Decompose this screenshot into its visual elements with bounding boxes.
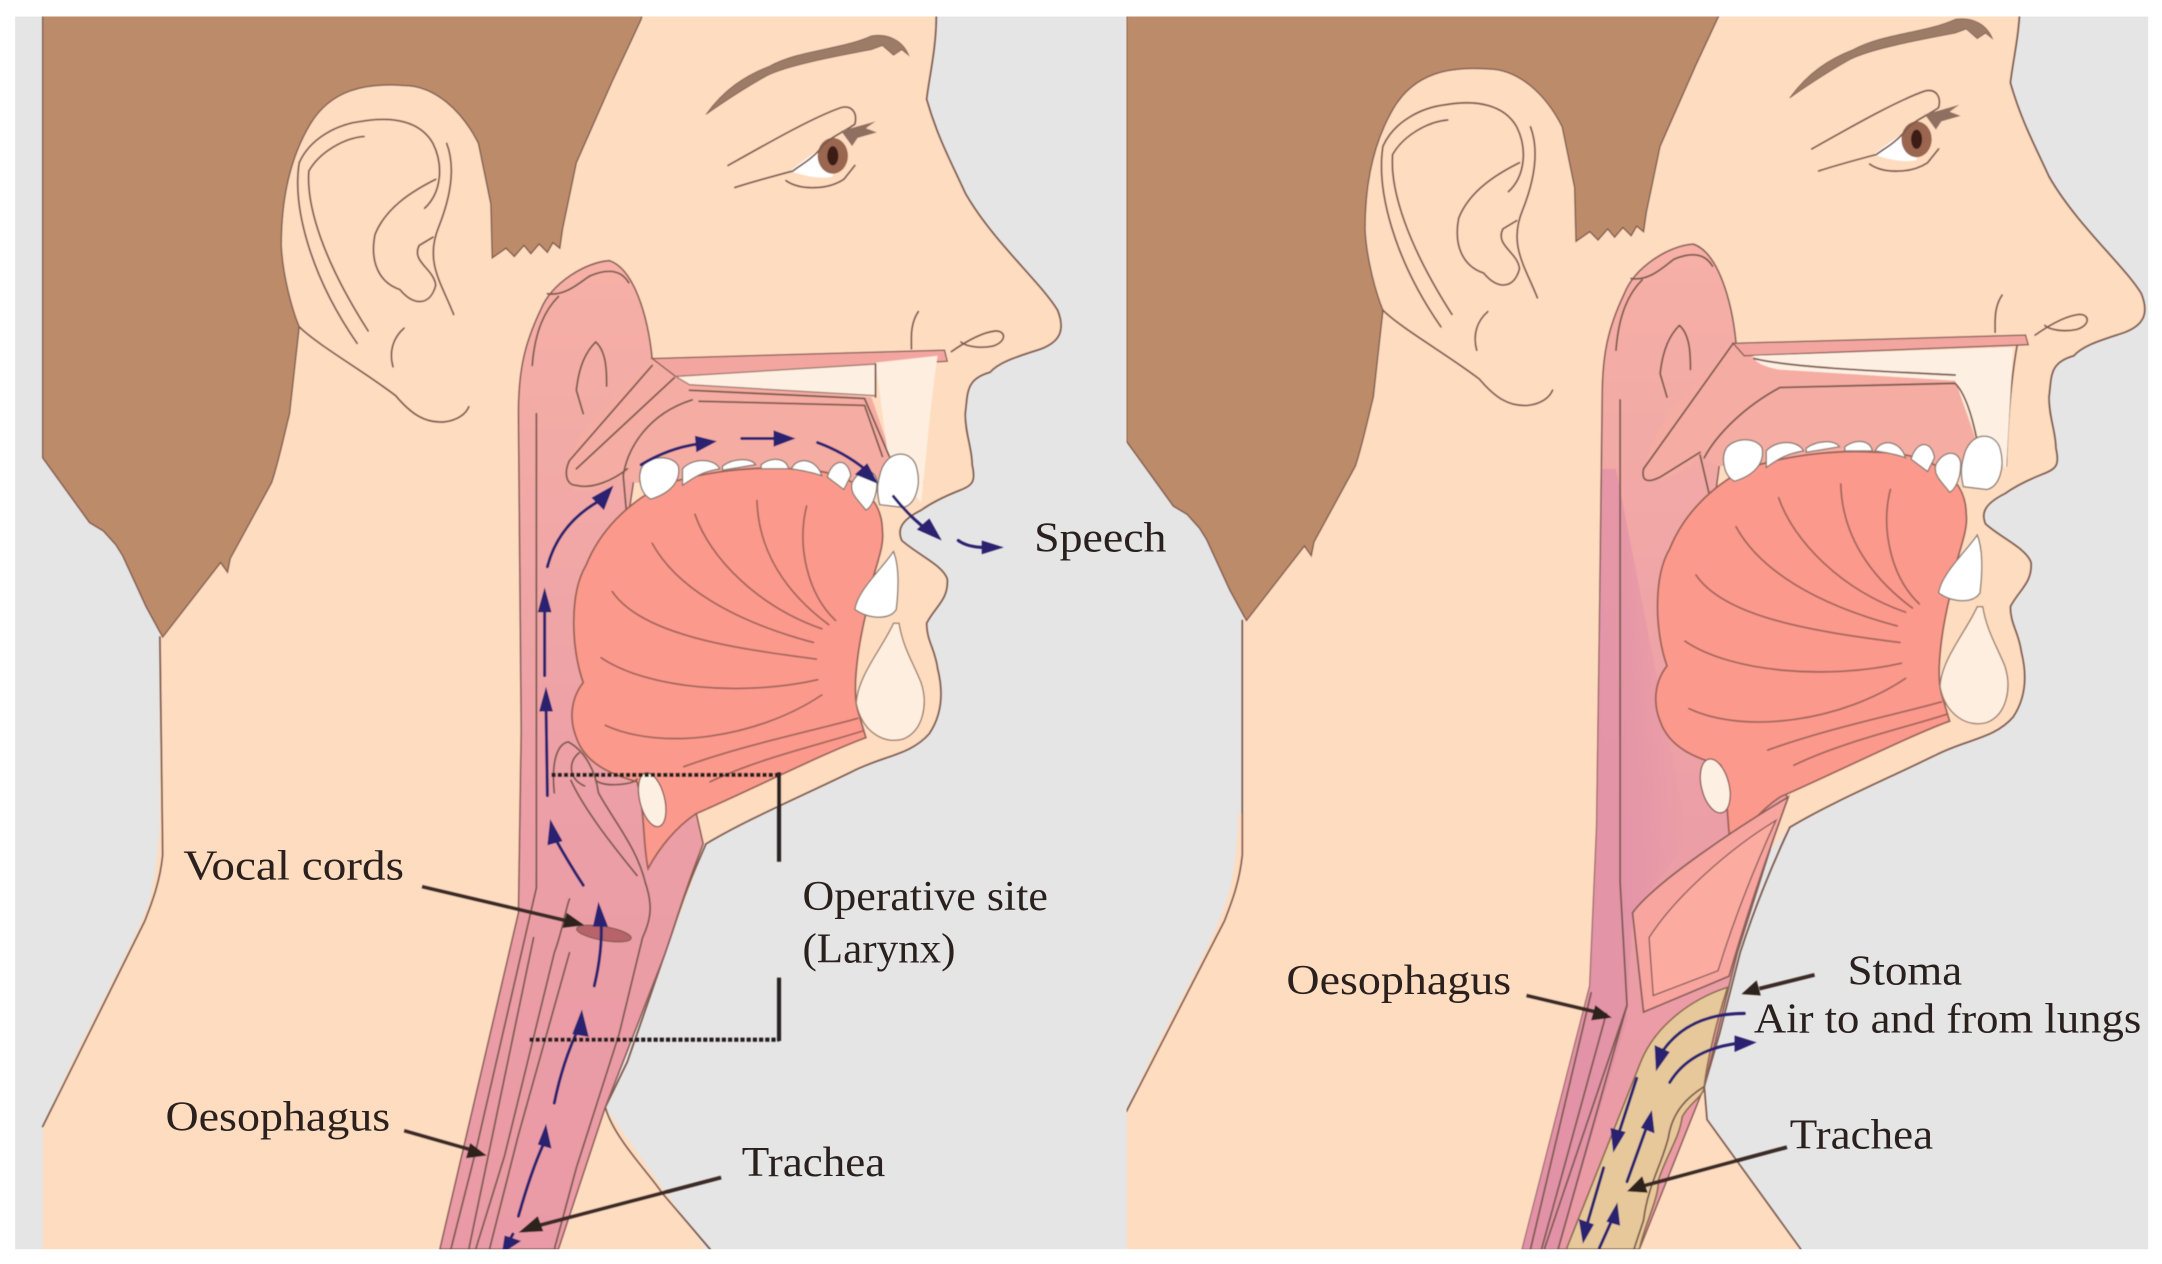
upper teeth: [1724, 436, 2002, 492]
leader line: oesophagus: [404, 1131, 487, 1158]
label: Air to and from lungs: Air to and from lungs: [1754, 996, 2141, 1043]
vocal cords: [576, 924, 632, 943]
oesophagus: [1522, 469, 1648, 1250]
reconstructed pharynx flap: [1633, 797, 1788, 1012]
label: Oesophagus: Oesophagus: [165, 1094, 390, 1141]
nostril and philtrum: [911, 312, 1003, 483]
neck outline: [43, 637, 710, 1249]
label: Stoma: Stoma: [1848, 947, 1962, 994]
label: Trachea: Trachea: [1790, 1112, 1933, 1159]
trachea: [1566, 987, 1728, 1249]
tongue, lower tooth and jaw bone: [1656, 452, 2008, 852]
leader line: trachea: [1627, 1147, 1787, 1193]
labels: before surgery: [165, 515, 1166, 1186]
airflow arrows: [502, 430, 1004, 1253]
face profile: [1790, 0, 2145, 827]
inner pharynx outline: [1544, 255, 1713, 1249]
pharynx and airway: [440, 261, 703, 1249]
panel: after surgery (stoma): [1127, 0, 2145, 1249]
hyoid bone: [637, 772, 668, 828]
ear: [1382, 103, 1553, 406]
label: Speech: Speech: [1034, 515, 1166, 562]
label: Larynx: (Larynx): [802, 925, 956, 972]
hair: [43, 0, 647, 637]
nostril and philtrum: [1995, 295, 2087, 466]
soft palate and mouth roof: [1643, 335, 2028, 496]
label: Oesophagus: Oesophagus: [1286, 957, 1511, 1004]
tongue, lower tooth and jaw bone: [572, 468, 924, 869]
ear: [298, 119, 469, 422]
epiglottis and larynx outline: [451, 742, 650, 1249]
label: Trachea: Trachea: [742, 1139, 885, 1186]
eye and eyebrow: [1790, 19, 1992, 171]
inner pharynx outline: [532, 271, 629, 888]
operative site bracket: [529, 772, 779, 1041]
leader line: trachea: [518, 1178, 721, 1233]
neck outline: [1127, 620, 1801, 1249]
label: Operative site (Larynx): Operative site: [802, 873, 1048, 920]
neck skin: [43, 809, 706, 1249]
labels: after surgery: [1286, 947, 2141, 1159]
face skin: [1244, 0, 2145, 880]
panel: before surgery (normal speech): [43, 0, 1061, 1253]
airflow arrows: [1579, 1013, 1757, 1248]
face profile: [706, 0, 1061, 844]
hair: [1127, 0, 1730, 620]
face skin: [160, 0, 1061, 896]
leader line: stoma: [1741, 975, 1815, 996]
soft palate and mouth roof: [566, 350, 947, 503]
pharynx: [1522, 244, 1787, 1249]
label: Vocal cords: Vocal cords: [183, 843, 404, 890]
neck skin: [1127, 801, 1801, 1249]
leader line: vocal cords: [422, 887, 585, 928]
upper teeth: [640, 454, 918, 510]
oesophagus inner lines: [1530, 993, 1704, 1249]
eye and eyebrow: [706, 35, 909, 188]
leader line: oesophagus: [1526, 996, 1612, 1020]
hyoid bone: [1699, 758, 1732, 814]
